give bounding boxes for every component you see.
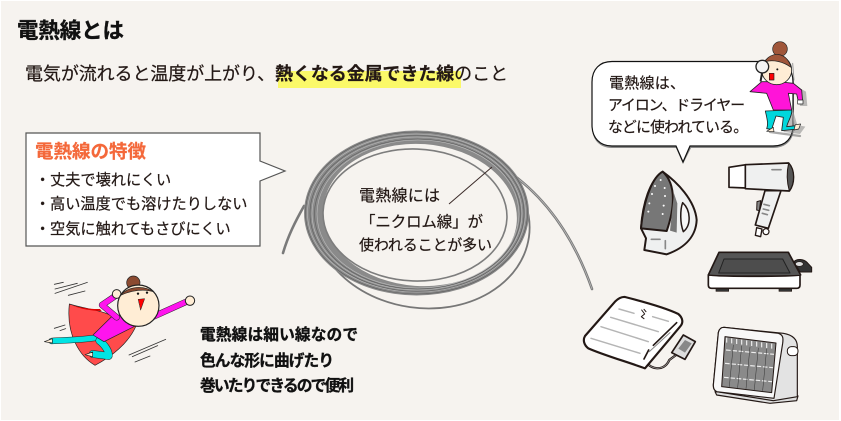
eye — [776, 68, 778, 70]
coil caption: 使われることが多い — [359, 236, 492, 254]
shadow — [770, 87, 807, 136]
mouth — [769, 73, 774, 80]
feature 2: ・ — [35, 196, 50, 213]
feature 2: 高い温度でも溶けたりしない — [50, 196, 247, 213]
raised arm — [102, 297, 117, 317]
speed lines — [54, 282, 166, 362]
appliances — [584, 163, 812, 403]
highlight — [278, 71, 461, 88]
legs — [52, 337, 98, 341]
feature 3: 空気に触れてもさびにくい — [50, 221, 231, 238]
feature 3: ・ — [35, 221, 50, 238]
bun — [773, 42, 787, 56]
legs — [765, 110, 797, 131]
subtitle: 電気が流れると温度が上がり、熱くなる金属できた線のこと — [25, 64, 508, 84]
speech bubble: 電熱線は、 — [609, 75, 685, 92]
coil caption: 電熱線には — [359, 187, 440, 205]
body — [750, 82, 803, 110]
features heading: 電熱線の特徴 — [35, 141, 146, 162]
icon: electric blanket — [584, 297, 695, 368]
hero caption: 巻いたりできるので便利 — [200, 377, 354, 395]
icon: ceramic heater — [713, 327, 798, 403]
hero caption: 色んな形に曲げたり — [200, 351, 334, 370]
bun — [127, 276, 140, 289]
icon: hot plate — [708, 252, 812, 291]
fists — [112, 290, 121, 298]
hair — [121, 287, 154, 295]
speech bubble: などに使われている。 — [608, 119, 748, 136]
icon: iron — [641, 172, 697, 254]
panel: features callout — [26, 133, 285, 246]
illustration: flying hero — [44, 276, 195, 365]
feature 1: 丈夫で壊れにくい — [50, 172, 171, 189]
hero caption — [200, 325, 358, 395]
feature 1: ・ — [35, 172, 50, 189]
hand — [798, 100, 803, 104]
shoes — [767, 124, 801, 132]
cape — [69, 304, 136, 365]
head — [762, 55, 792, 85]
head — [118, 285, 159, 326]
icon: hair dryer — [729, 163, 794, 237]
coil caption: 「ニクロム線」が — [360, 213, 483, 231]
wire coil — [283, 122, 592, 322]
leader line — [449, 167, 492, 204]
coil caption — [359, 187, 492, 254]
forward arm — [153, 302, 185, 317]
illustration: girl with magnifier — [750, 42, 807, 136]
speech bubble: アイロン、ドライヤー — [608, 98, 745, 114]
hair — [765, 54, 791, 67]
hero caption: 電熱線は細い線なので — [200, 325, 358, 344]
speech bubble — [592, 62, 794, 164]
title: 電熱線とは — [17, 19, 124, 43]
body — [93, 313, 137, 342]
face — [137, 292, 139, 295]
magnifier — [756, 60, 769, 73]
